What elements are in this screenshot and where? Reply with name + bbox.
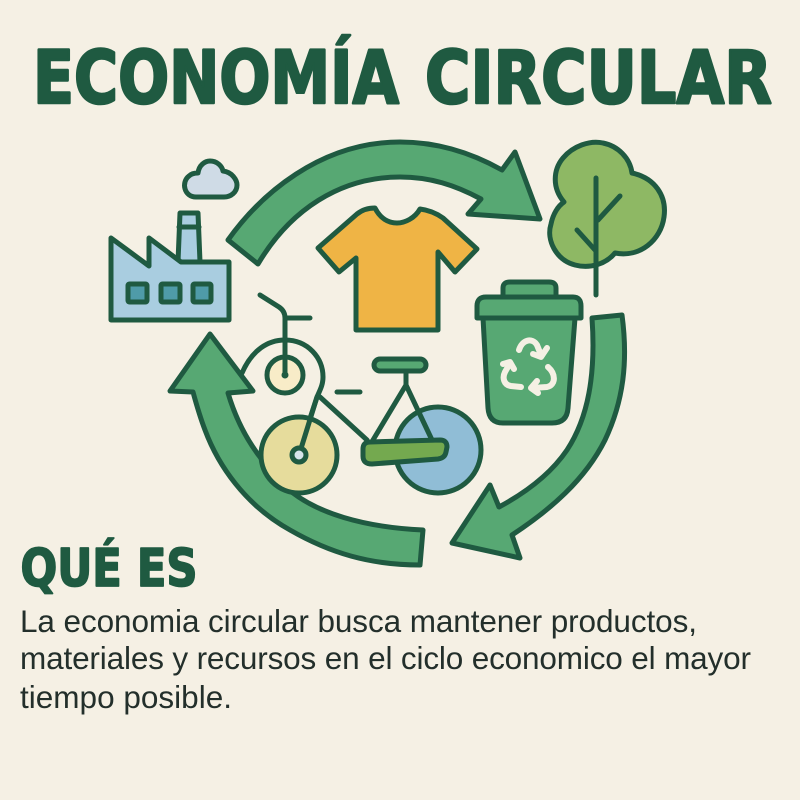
icon: bicycle xyxy=(242,295,481,493)
small wheel xyxy=(267,357,303,393)
icon: tree xyxy=(550,142,664,295)
icon: front wheel xyxy=(261,397,337,493)
title: ECONOMÍA xyxy=(33,35,399,121)
icon: factory xyxy=(111,213,229,320)
heading: qué es: QUÉ ES xyxy=(20,538,198,599)
text block: description: materiales y recursos en el ciclo economico el mayor xyxy=(20,640,751,676)
title xyxy=(33,35,772,121)
text block: description: La economia circular busca mantener productos, xyxy=(20,603,697,639)
chimney xyxy=(178,213,200,262)
arrow: right xyxy=(452,315,625,558)
frame xyxy=(320,397,367,440)
back wheel xyxy=(395,407,481,493)
text block: description: tiempo posible. xyxy=(20,679,232,715)
fork loop xyxy=(242,340,323,455)
saddle xyxy=(374,359,426,371)
pedal bar xyxy=(363,440,447,464)
factory building xyxy=(111,238,229,320)
handlebars xyxy=(260,295,285,375)
arrow: left xyxy=(170,334,423,565)
dash xyxy=(337,390,360,394)
recycling symbol xyxy=(503,340,554,393)
text block: description xyxy=(20,603,751,715)
icon: recycling bin xyxy=(477,282,581,423)
arrow: top xyxy=(228,142,540,264)
icon: cloud xyxy=(185,161,237,197)
icon: t-shirt xyxy=(318,208,477,330)
windows xyxy=(128,284,211,302)
